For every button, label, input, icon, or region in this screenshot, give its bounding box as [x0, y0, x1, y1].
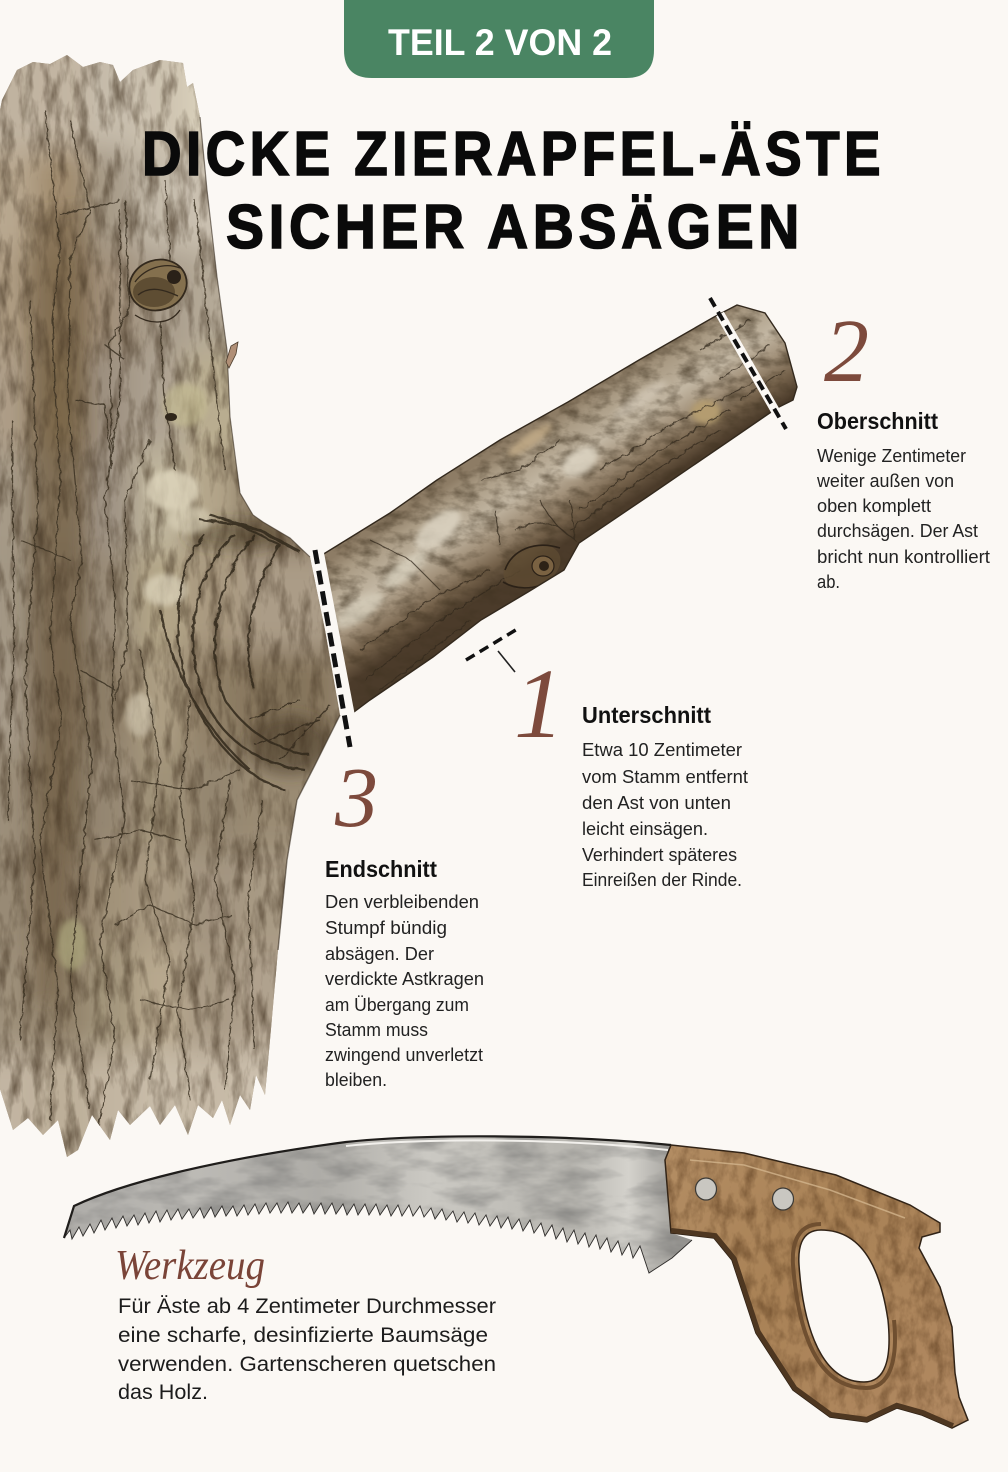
title: DICKE ZIERAPFEL-ÄSTE	[142, 120, 885, 189]
text block: Unterschnitt: Einreißen der Rinde.	[582, 870, 742, 890]
text block: Unterschnitt: Unterschnitt	[582, 702, 711, 728]
text block: Werkzeug: Werkzeug	[115, 1243, 265, 1289]
text block: Endschnitt: zwingend unverletzt	[325, 1045, 483, 1065]
text block: Unterschnitt: den Ast von unten	[582, 793, 731, 813]
branch knot	[502, 544, 560, 589]
text block: Endschnitt: bleiben.	[325, 1070, 387, 1090]
text block: Oberschnitt: Wenige Zentimeter	[817, 446, 966, 466]
branch collar folds	[160, 515, 330, 790]
lichen patches on trunk	[57, 383, 212, 971]
pale lichen on branch	[331, 376, 721, 634]
text block: Unterschnitt: Verhindert späteres	[582, 845, 737, 865]
text block: Oberschnitt: Oberschnitt	[817, 408, 938, 434]
twig stub	[226, 342, 238, 368]
text block: Werkzeug: verwenden. Gartenscheren quetschen	[118, 1353, 496, 1376]
text block: Oberschnitt: oben komplett	[817, 496, 931, 516]
text block: Werkzeug	[115, 1243, 496, 1404]
illustration: pruning saw	[60, 1130, 975, 1435]
text block: Werkzeug: Für Äste ab 4 Zentimeter Durchmesser	[118, 1295, 496, 1318]
title	[142, 120, 885, 262]
title: SICHER ABSÄGEN	[226, 193, 804, 262]
illustration: tree trunk	[0, 30, 345, 1180]
saw blade	[60, 1130, 700, 1280]
trunk edge line	[200, 117, 310, 557]
banner: TEIL 2 VON 2	[388, 22, 612, 63]
trunk knot	[123, 252, 193, 322]
text block: Werkzeug: das Holz.	[118, 1381, 208, 1404]
number 2: 2	[824, 302, 869, 401]
small trunk hole	[165, 413, 177, 421]
text block: Endschnitt: absägen. Der	[325, 944, 434, 964]
text block: Endschnitt	[325, 856, 484, 1090]
number 3: 3	[334, 749, 378, 845]
text block: Unterschnitt: leicht einsägen.	[582, 819, 708, 839]
text block: Endschnitt: Stumpf bündig	[325, 918, 447, 938]
text block: Endschnitt: Endschnitt	[325, 856, 437, 882]
text block: Oberschnitt: weiter außen von	[816, 471, 954, 491]
text block: Oberschnitt: bricht nun kontrolliert	[817, 547, 990, 567]
text block: Oberschnitt: ab.	[817, 572, 840, 592]
branch grain lines	[360, 320, 785, 690]
banner	[344, 0, 654, 78]
text block: Oberschnitt: durchsägen. Der Ast	[817, 521, 978, 541]
cut line 1: Unterschnitt	[466, 628, 519, 672]
cut line 2: Oberschnitt	[710, 298, 786, 429]
bark cracks	[8, 110, 262, 1130]
text block: Werkzeug: eine scharfe, desinfizierte Baumsäge	[118, 1324, 488, 1347]
rivet 1	[696, 1178, 716, 1200]
saw handle	[660, 1140, 975, 1435]
text block: Unterschnitt	[582, 702, 748, 890]
dark bark stripe and collar shading	[28, 205, 332, 1000]
number 1: 1	[514, 648, 564, 759]
text block: Endschnitt: verdickte Astkragen	[325, 969, 484, 989]
text block: Endschnitt: Den verbleibenden	[325, 892, 479, 912]
text block: Unterschnitt: Etwa 10 Zentimeter	[582, 740, 742, 760]
rivet 2	[772, 1188, 794, 1210]
text block: Endschnitt: Stamm muss	[325, 1020, 428, 1040]
text block: Endschnitt: am Übergang zum	[325, 995, 469, 1015]
cut line 3: Endschnitt	[315, 550, 352, 747]
text block: Unterschnitt: vom Stamm entfernt	[582, 767, 748, 787]
illustration: sawn branch	[310, 295, 810, 725]
text block: Oberschnitt	[816, 408, 990, 592]
